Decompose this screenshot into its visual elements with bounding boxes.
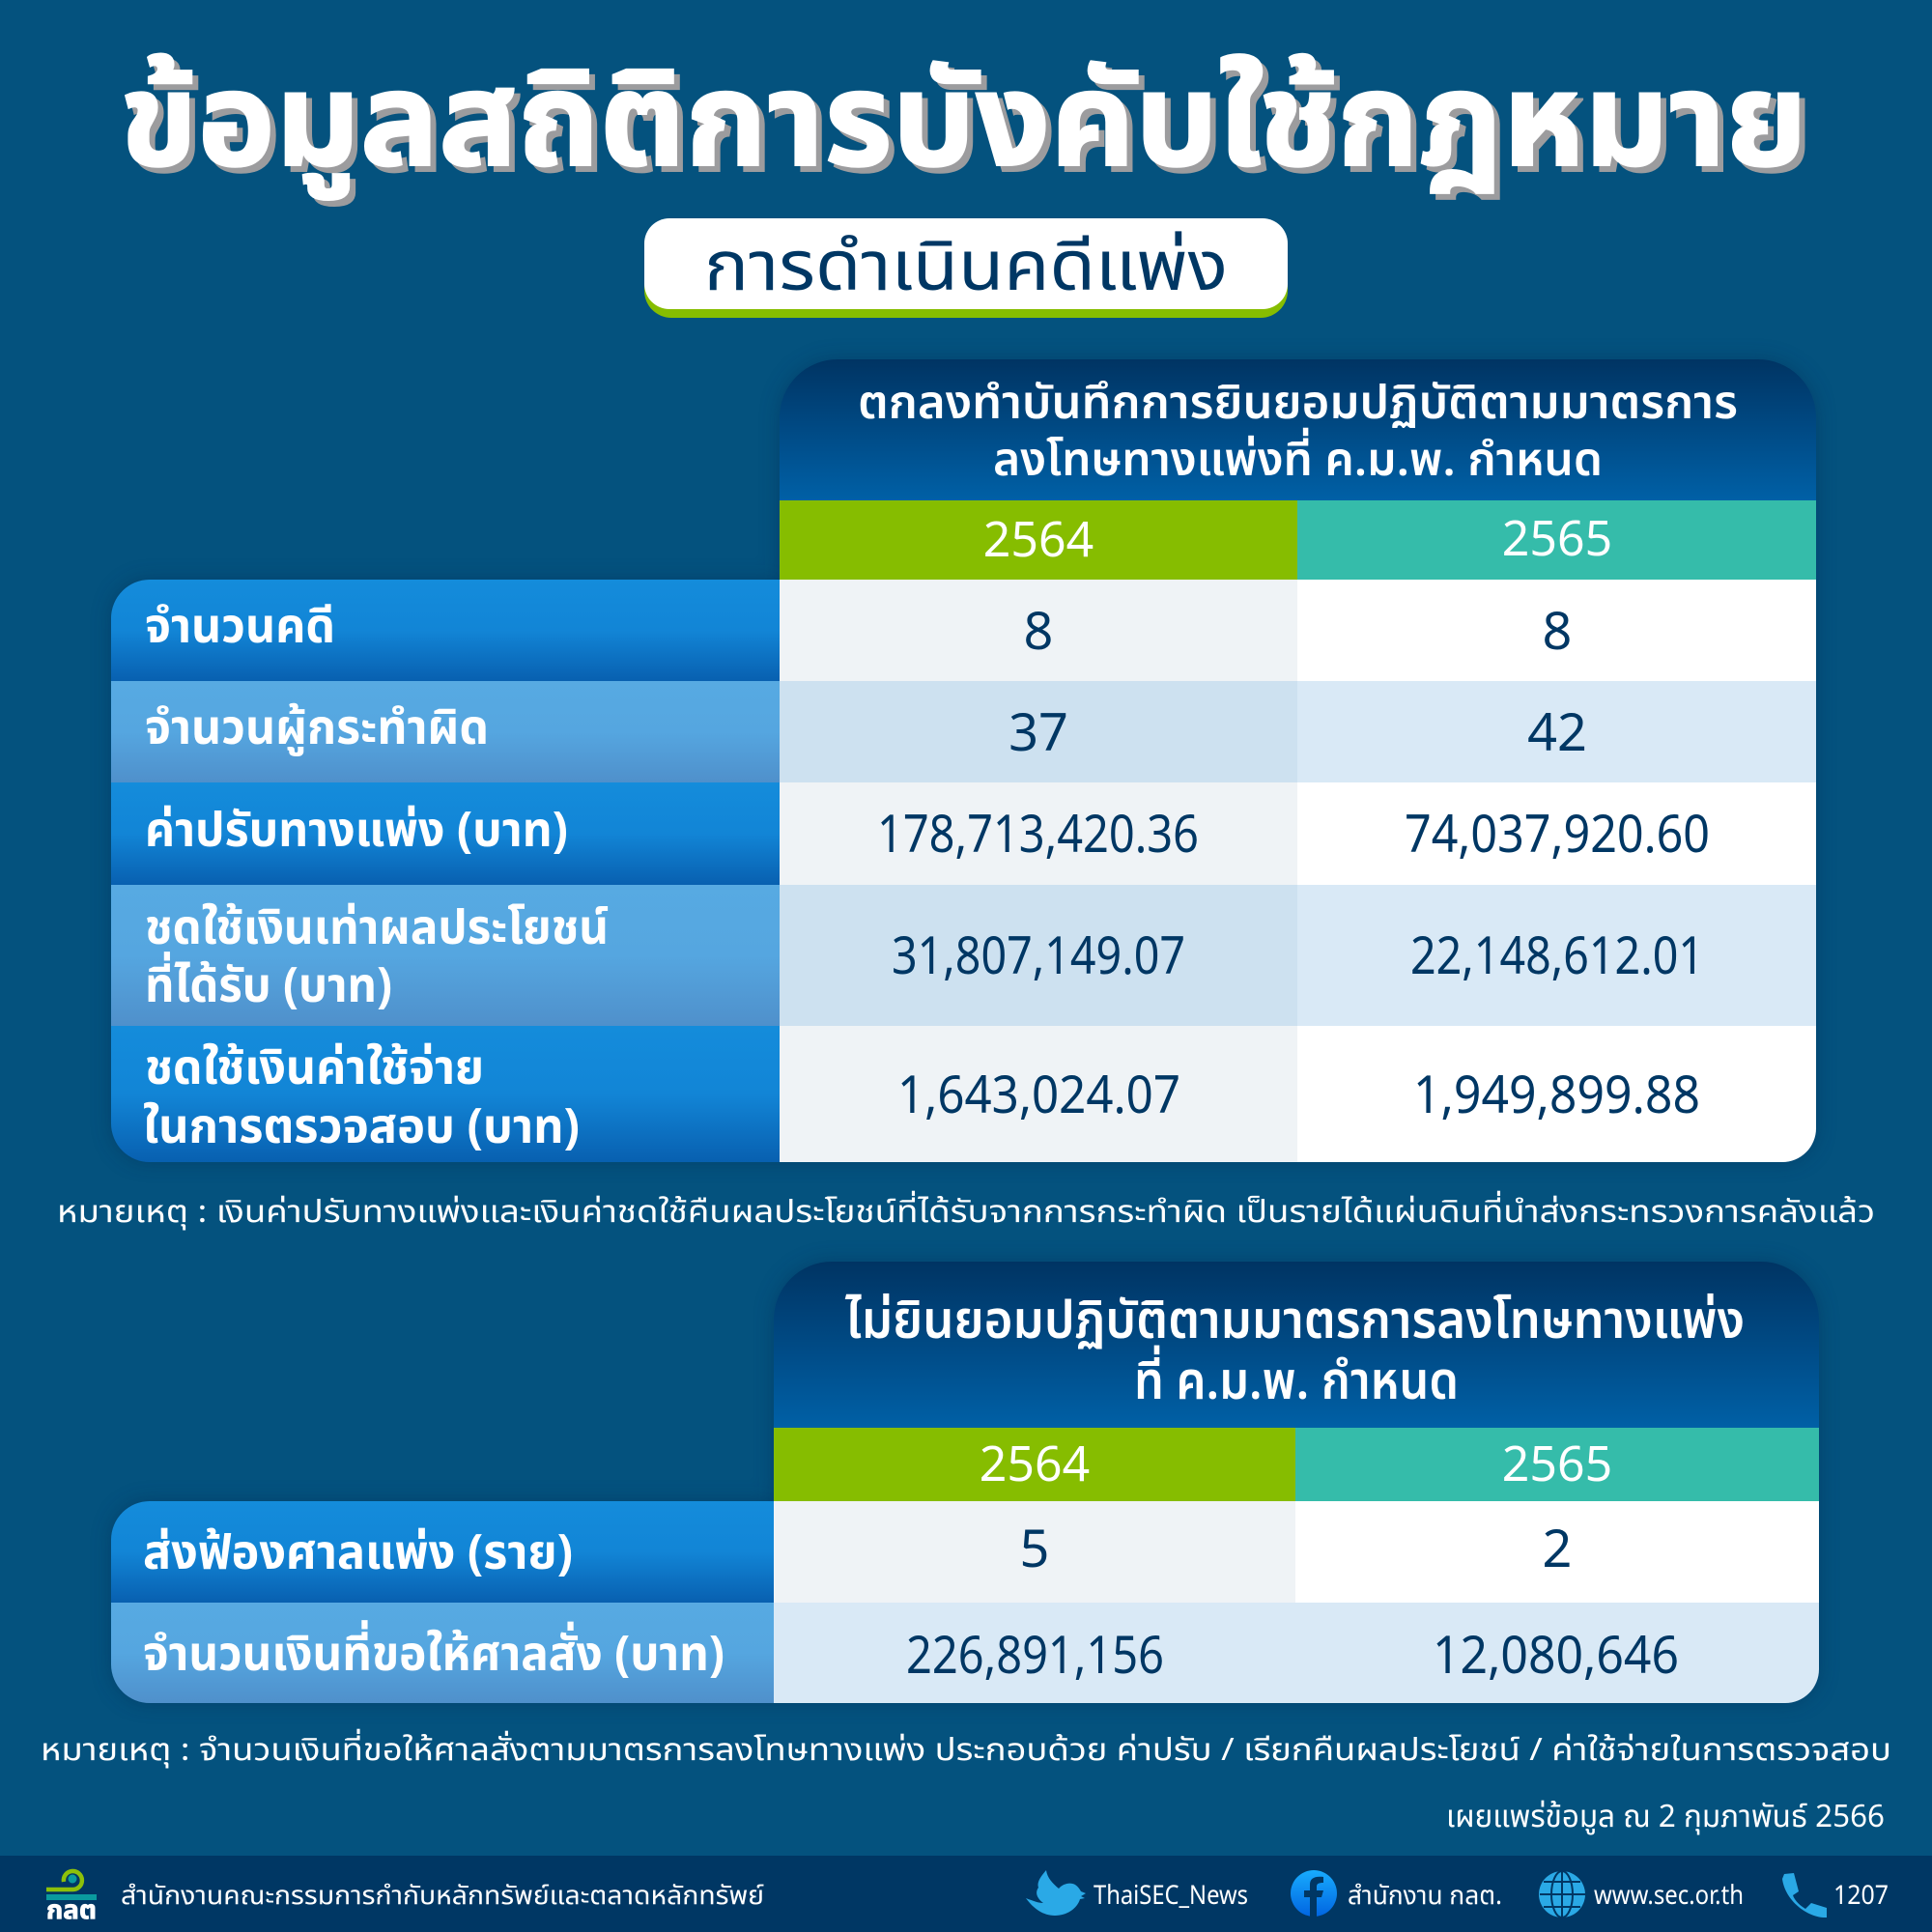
table 1 years	[983, 504, 1612, 579]
table 2 years: 2564	[980, 1430, 1090, 1503]
table 1 values: 1,643,024.07	[897, 1059, 1180, 1137]
table 1 row labels: ชดใช้เงินเท่าผลประโยชน์	[145, 893, 609, 966]
table 1 values: 1,949,899.88	[1413, 1059, 1700, 1137]
table 1 values: 42	[1527, 696, 1587, 775]
icon: phone	[1782, 1873, 1827, 1918]
table 1 row labels	[143, 591, 609, 1165]
table 2 values	[906, 1513, 1679, 1697]
hotline: 1207	[1833, 1877, 1889, 1917]
twitter handle: ThaiSEC_News	[1094, 1877, 1248, 1917]
icon: facebook	[1291, 1870, 1337, 1917]
organisation name: สำนักงานคณะกรรมการกำกับหลักทรัพย์และตลาดหลักทรัพย์	[121, 1877, 764, 1917]
table 1 heading	[858, 369, 1738, 497]
table 1 values	[877, 595, 1710, 1137]
table 1 values: 8	[1024, 595, 1053, 673]
table 1 heading: ลงโทษทางแพ่งที่ ค.ม.พ. กำหนด	[993, 426, 1603, 497]
table 1 years: 2565	[1502, 504, 1612, 578]
title: ข้อมูลสถิติการบังคับใช้กฎหมาย	[126, 33, 1813, 231]
table 2 row labels: จำนวนเงินที่ขอให้ศาลสั่ง (บาท)	[143, 1619, 724, 1692]
publication date: เผยแพร่ข้อมูล ณ 2 กุมภาพันธ์ 2566	[1446, 1795, 1885, 1841]
table 1 values: 8	[1543, 595, 1572, 673]
table 1 row labels: จำนวนผู้กระทำผิด	[145, 693, 489, 766]
panel: table 2	[111, 1262, 1819, 1703]
table 1 row labels: ที่ได้รับ (บาท)	[145, 951, 392, 1024]
table 2 years	[980, 1430, 1612, 1503]
table 1 years: 2564	[983, 505, 1094, 579]
facebook name: สำนักงาน กลต.	[1348, 1877, 1502, 1917]
table 1 heading: ตกลงทำบันทึกการยินยอมปฏิบัติตามมาตรการ	[858, 369, 1738, 440]
table 2 heading: ไม่ยินยอมปฏิบัติตามมาตรการลงโทษทางแพ่ง	[844, 1284, 1745, 1362]
panel: table 1	[111, 359, 1816, 1165]
table 1 values: 178,713,420.36	[877, 798, 1199, 876]
table 1 values: 22,148,612.01	[1410, 920, 1704, 998]
icon: globe	[1539, 1871, 1585, 1918]
footer bar	[0, 1856, 1932, 1932]
icon: SEC logo: กลต	[46, 1891, 97, 1931]
table 1 row labels: ในการตรวจสอบ (บาท)	[143, 1092, 580, 1165]
website: www.sec.or.th	[1594, 1877, 1744, 1917]
title: ข้อมูลสถิติการบังคับใช้กฎหมาย	[120, 27, 1807, 225]
icon: SEC logo	[46, 1871, 97, 1931]
icon: twitter	[1026, 1870, 1086, 1916]
table 1 values: 74,037,920.60	[1405, 798, 1710, 876]
table 1 values: 37	[1009, 696, 1068, 775]
table 2 values: 2	[1543, 1513, 1572, 1591]
table 2 values: 226,891,156	[906, 1619, 1164, 1697]
note 2: หมายเหตุ : จำนวนเงินที่ขอให้ศาลสั่งตามมาตรการลงโทษทางแพ่ง ประกอบด้วย ค่าปรับ / เรียกคืนผลประโยชน์ / ค่าใช้จ่ายในการตรวจสอบ	[41, 1728, 1891, 1775]
table 1 values: 31,807,149.07	[892, 920, 1185, 998]
table 1 row labels: ชดใช้เงินค่าใช้จ่าย	[145, 1033, 484, 1106]
table 2 heading: ที่ ค.ม.พ. กำหนด	[1134, 1345, 1459, 1423]
table 2 years: 2565	[1502, 1430, 1612, 1503]
table 2 row labels: ส่งฟ้องศาลแพ่ง (ราย)	[143, 1518, 573, 1591]
subtitle pill: การดำเนินคดีแพ่ง	[704, 217, 1228, 322]
table 2 values: 5	[1020, 1513, 1049, 1591]
note 1: หมายเหตุ : เงินค่าปรับทางแพ่งและเงินค่าชดใช้คืนผลประโยชน์ที่ได้รับจากการกระทำผิด เป็นรายได้แผ่นดินที่นำส่งกระทรวงการคลังแล้ว	[57, 1190, 1875, 1236]
table 1 row labels: ค่าปรับทางแพ่ง (บาท)	[145, 795, 568, 868]
table 2 values: 12,080,646	[1433, 1619, 1679, 1697]
table 2 row labels	[143, 1518, 724, 1692]
table 2 heading	[844, 1284, 1745, 1423]
table 1 row labels: จำนวนคดี	[145, 591, 335, 665]
